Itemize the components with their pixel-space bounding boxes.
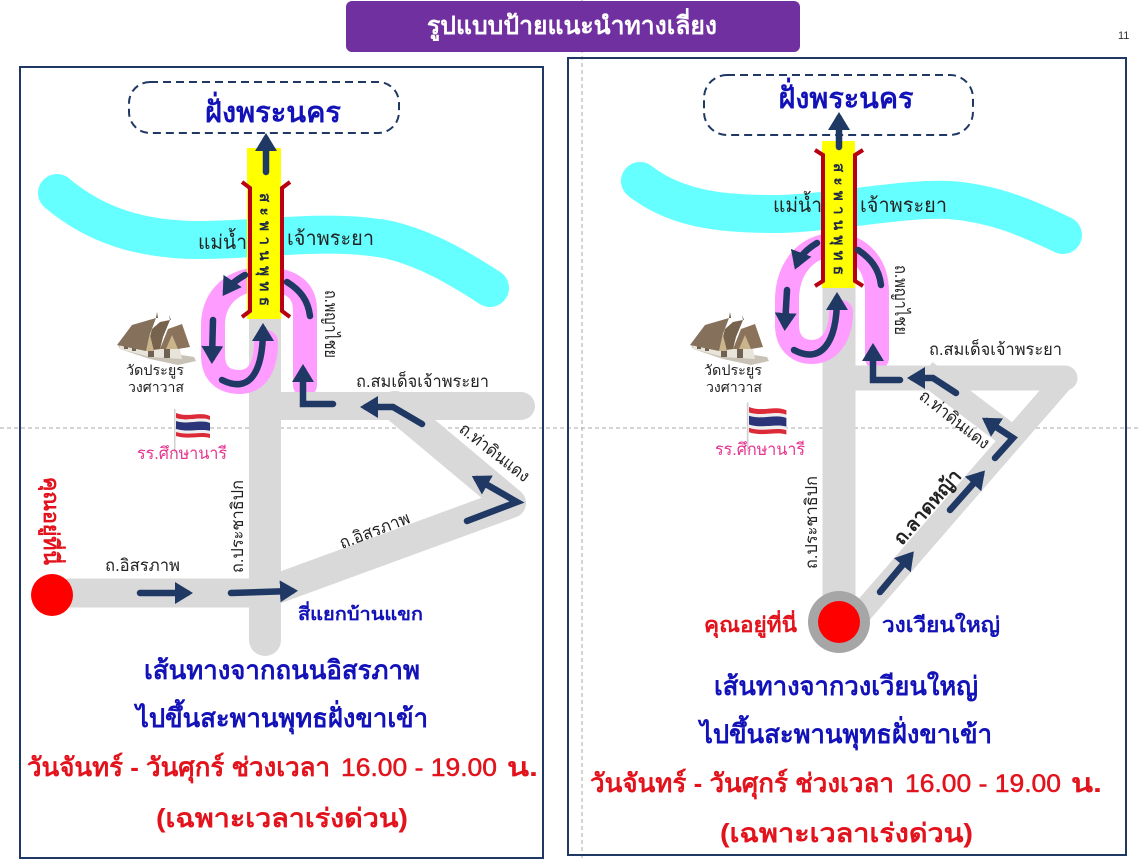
destination box: ฝั่งพระนคร xyxy=(205,91,341,129)
roads xyxy=(839,372,1065,620)
river: Chao Phraya xyxy=(57,193,490,288)
destination box: ฝั่งพระนคร xyxy=(778,77,914,115)
destination box xyxy=(704,75,973,135)
road labels: ถ.อิสรภาพ xyxy=(105,556,180,575)
direction arrows xyxy=(140,139,517,593)
river labels: แม่น้ำ xyxy=(773,191,822,217)
you are here label: คุณอยู่ที่นี่ xyxy=(37,477,67,566)
river labels: เจ้าพระยา xyxy=(287,228,374,250)
temple label: วงศาวาส xyxy=(706,379,762,395)
route caption: เส้นทางจากวงเวียนใหญ่ xyxy=(714,671,978,702)
route caption: เส้นทางจากถนนอิสรภาพ xyxy=(144,655,420,685)
bridge: Memorial Bridge: สะพานพุทธ xyxy=(829,163,847,275)
route caption: ไปขึ้นสะพานพุทธฝั่งขาเข้า xyxy=(697,714,992,751)
road labels xyxy=(105,290,533,575)
road labels: ถ.ลาดหญ้า xyxy=(889,465,966,549)
temple label: วัดประยูร xyxy=(126,362,184,379)
route caption: 16.00 - 19.00 xyxy=(341,754,497,782)
school label: รร.ศึกษานารี xyxy=(137,444,227,463)
you are here label: คุณอยู่ที่นี่ xyxy=(704,609,798,639)
you are here marker xyxy=(31,574,73,616)
direction arrows xyxy=(785,118,1013,592)
title banner: รูปแบบป้ายแนะนำทางเลี่ยง xyxy=(427,8,717,42)
route caption: วันจันทร์ - วันศุกร์ ช่วงเวลา xyxy=(27,752,330,784)
destination box xyxy=(129,82,399,133)
bridge: Memorial Bridge: สะพานพุทธ xyxy=(255,193,273,306)
route caption: 16.00 - 19.00 xyxy=(905,770,1061,798)
junction label: สี่แยกบ้านแขก xyxy=(298,601,423,624)
vertical road: Prachathipok xyxy=(249,319,281,640)
temple label xyxy=(126,362,184,395)
circle label: วงเวียนใหญ่ xyxy=(882,612,1000,638)
route caption: (เฉพาะเวลาเร่งด่วน) xyxy=(156,803,408,833)
temple icon xyxy=(690,312,769,365)
pink U-turn ramp xyxy=(787,245,877,358)
panel: route from Itsaraphap road xyxy=(20,67,543,858)
route caption: ไปขึ้นสะพานพุทธฝั่งขาเข้า xyxy=(133,698,428,735)
page number: 11 xyxy=(1118,30,1129,42)
road labels xyxy=(802,265,1062,569)
river: Chao Phraya xyxy=(640,181,1063,235)
temple label: วัดประยูร xyxy=(704,362,762,379)
road labels: ถ.สมเด็จเจ้าพระยา xyxy=(929,338,1062,359)
road labels: ถ.ท่าดินแดง xyxy=(916,386,993,453)
bridge: Memorial Bridge xyxy=(242,148,290,319)
route caption: (เฉพาะเวลาเร่งด่วน) xyxy=(720,818,973,848)
panel: route from Wongwian Yai xyxy=(568,58,1126,855)
road labels: ถ.ประชาธิปก xyxy=(228,480,247,573)
temple label xyxy=(704,362,762,395)
road labels: ถ.พญาไชย xyxy=(891,265,912,335)
roads xyxy=(70,406,521,593)
route caption xyxy=(590,671,1102,848)
you are here marker xyxy=(808,591,870,653)
title banner xyxy=(346,1,800,52)
river labels xyxy=(198,228,374,254)
icon: Thai flag xyxy=(174,409,210,453)
road labels: ถ.ประชาธิปก xyxy=(802,476,821,569)
river labels xyxy=(773,191,947,217)
road labels: ถ.อิสรภาพ xyxy=(337,508,413,553)
vertical road: Prachathipok xyxy=(822,288,856,615)
road labels: ถ.พญาไชย xyxy=(321,290,342,358)
road labels: ถ.ท่าดินแดง xyxy=(456,419,533,486)
route caption: น. xyxy=(1071,768,1102,798)
road labels: ถ.สมเด็จเจ้าพระยา xyxy=(356,370,489,391)
river labels: เจ้าพระยา xyxy=(860,195,947,217)
route caption: น. xyxy=(507,752,538,782)
route caption xyxy=(27,655,538,833)
pink U-turn ramp xyxy=(213,279,305,385)
temple label: วงศาวาส xyxy=(128,379,184,395)
route caption: วันจันทร์ - วันศุกร์ ช่วงเวลา xyxy=(590,768,894,800)
river labels: แม่น้ำ xyxy=(198,228,247,254)
icon: Thai flag xyxy=(747,403,786,451)
bridge: Memorial Bridge xyxy=(815,141,863,288)
temple icon xyxy=(117,312,196,365)
school label: รร.ศึกษานารี xyxy=(715,440,805,459)
